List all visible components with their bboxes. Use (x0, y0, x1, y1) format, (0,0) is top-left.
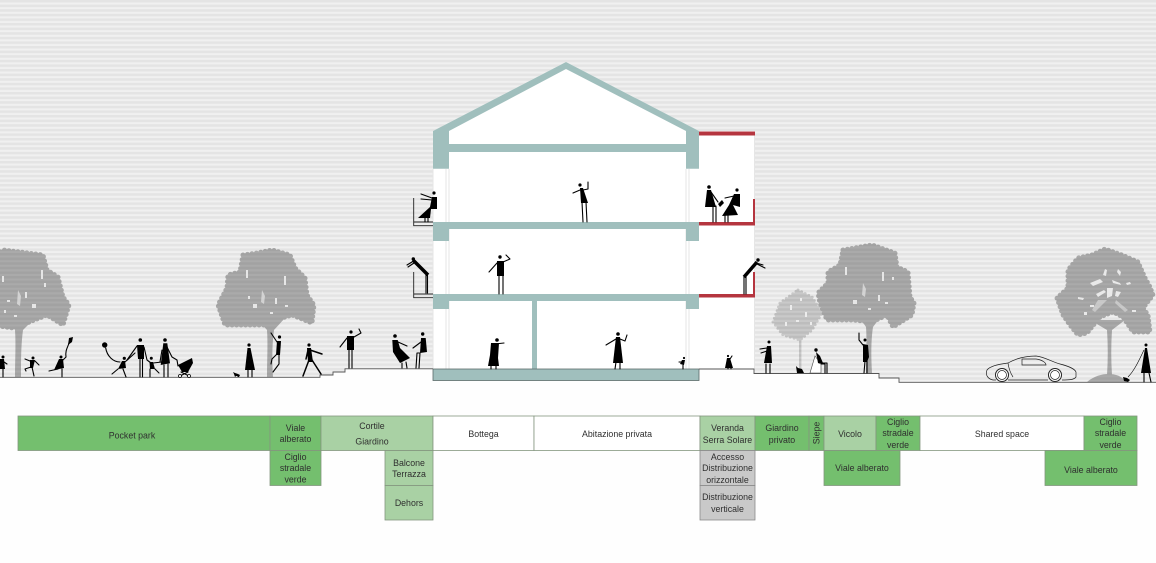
ground line (0, 369, 1156, 382)
cell: Siepe: Siepe (812, 422, 822, 444)
cell: Ciglio stradale verde right: stradale (1095, 428, 1126, 438)
cell: Balcone Terrazza (385, 450, 433, 486)
cell: Distribuzione verticale: verticale (711, 504, 744, 514)
tree: street right of building (818, 245, 914, 373)
child in front of veranda (725, 355, 733, 369)
man middle room (489, 255, 510, 294)
cell: Shared space (920, 416, 1084, 450)
cell: Ciglio stradale verde: Ciglio (887, 417, 909, 427)
cell: Viale alberato center (824, 450, 900, 486)
ground slab (433, 369, 699, 380)
cell: Ciglio stradale verde left: Ciglio (284, 452, 307, 462)
roof and upper walls (433, 62, 699, 169)
cell: Dehors (385, 486, 433, 520)
dog (233, 372, 240, 377)
walker (303, 343, 322, 376)
cell: Viale alberato right (1045, 450, 1137, 486)
cell: Balcone Terrazza: Terrazza (392, 469, 426, 479)
cell: Ciglio stradale verde left: stradale (280, 463, 311, 473)
cell: Vicolo: Vicolo (838, 429, 862, 439)
cell: Shared space: Shared space (975, 429, 1029, 439)
cell: Accesso Distribuzione orizzontale: orizzontale (706, 475, 749, 485)
cell: Siepe (809, 416, 824, 450)
cell: Bottega (433, 416, 534, 450)
ground: white terrain profile (0, 368, 1156, 563)
cell: Ciglio stradale verde right: Ciglio (1099, 417, 1122, 427)
cell: Giardino privato: privato (769, 435, 795, 445)
people: building (407, 182, 765, 369)
background: striped sky (0, 0, 1156, 383)
woman standing (245, 343, 255, 377)
cell: Ciglio stradale verde left: verde (284, 474, 307, 484)
cell: Viale alberato right: Viale alberato (1064, 465, 1118, 475)
cell: Ciglio stradale verde left (270, 450, 321, 486)
interior white (433, 62, 699, 369)
man on steps waving (340, 329, 361, 368)
cell: Viale alberato: alberato (280, 434, 311, 444)
cell: Veranda Serra Solare (700, 416, 755, 450)
cell: Pocket park (18, 416, 270, 450)
left balconies (414, 198, 433, 298)
cell: Ciglio stradale verde right: verde (1099, 440, 1122, 450)
tree: courtyard (218, 250, 314, 377)
cell: Viale alberato center: Viale alberato (835, 463, 889, 473)
cell: Viale alberato: Viale (286, 423, 305, 433)
second floor slab (433, 222, 699, 241)
first floor slab (433, 294, 699, 309)
child at edge (0, 356, 7, 377)
cell: Viale alberato (270, 416, 321, 450)
cell: Ciglio stradale verde (876, 416, 920, 450)
seated woman courtyard (392, 334, 410, 368)
cell: Bottega: Bottega (468, 429, 499, 439)
cell: Veranda Serra Solare: Serra Solare (703, 435, 752, 445)
cell: Veranda Serra Solare: Veranda (711, 423, 744, 433)
cell: Distribuzione verticale (700, 486, 755, 520)
woman with stroller (160, 338, 178, 377)
cell: Abitazione privata (534, 416, 700, 450)
veranda man leaning (744, 258, 765, 294)
interior wall (532, 301, 537, 369)
people: street right (760, 333, 1151, 382)
cell: Ciglio stradale verde: verde (887, 440, 909, 450)
climber on tree (271, 333, 281, 372)
people: park group (0, 329, 427, 378)
cell: Vicolo (824, 416, 876, 450)
woman gesture (760, 340, 772, 373)
child with kite (49, 337, 73, 377)
balcony man leaning (407, 257, 428, 293)
running child (25, 356, 39, 376)
cell: Dehors: Dehors (395, 498, 424, 508)
woman walking dog (1123, 344, 1151, 382)
violinist (488, 338, 504, 369)
cell: Pocket park: Pocket park (109, 430, 156, 440)
extension volume (699, 131, 755, 369)
couple on veranda: woman (718, 188, 740, 222)
cell: Ciglio stradale verde right (1084, 416, 1137, 450)
car (986, 356, 1076, 382)
cell: Giardino privato (755, 416, 809, 450)
cell: Cortile Giardino: Cortile (359, 421, 385, 431)
cell: Accesso Distribuzione orizzontale: Accesso (711, 452, 744, 462)
woman ground floor (606, 332, 627, 369)
child between (150, 357, 162, 377)
cell: Cortile Giardino (321, 416, 433, 450)
stroller (178, 358, 193, 378)
red veranda elements (699, 132, 755, 298)
seated man courtyard (413, 332, 427, 368)
tree: far left (0, 250, 69, 377)
small child ground floor (679, 357, 685, 369)
cell: Accesso Distribuzione orizzontale: Distribuzione (702, 463, 753, 473)
sitter on bench (810, 348, 827, 373)
man waving at tree (859, 333, 869, 373)
cell: Distribuzione verticale: Distribuzione (702, 492, 753, 502)
building (414, 62, 755, 380)
man with child (127, 338, 151, 377)
cell: Cortile Giardino: Giardino (355, 436, 389, 446)
man upper room (573, 182, 588, 222)
cell: Balcone Terrazza: Balcone (393, 458, 425, 468)
tree: far right with mound (1057, 249, 1153, 382)
balcony woman upper (418, 191, 437, 222)
attic floor (449, 144, 686, 152)
couple on veranda: man (705, 185, 718, 222)
cell: Abitazione privata: Abitazione privata (582, 429, 652, 439)
legend table: functional strip (18, 416, 1137, 520)
window jambs (433, 135, 754, 369)
cell: Accesso Distribuzione orizzontale (700, 450, 755, 486)
girl with balloon (102, 342, 135, 377)
cell: Ciglio stradale verde: stradale (882, 428, 914, 438)
tree: sparse small tree (773, 290, 822, 373)
cell: Giardino privato: Giardino (765, 423, 799, 433)
cat (796, 366, 804, 373)
